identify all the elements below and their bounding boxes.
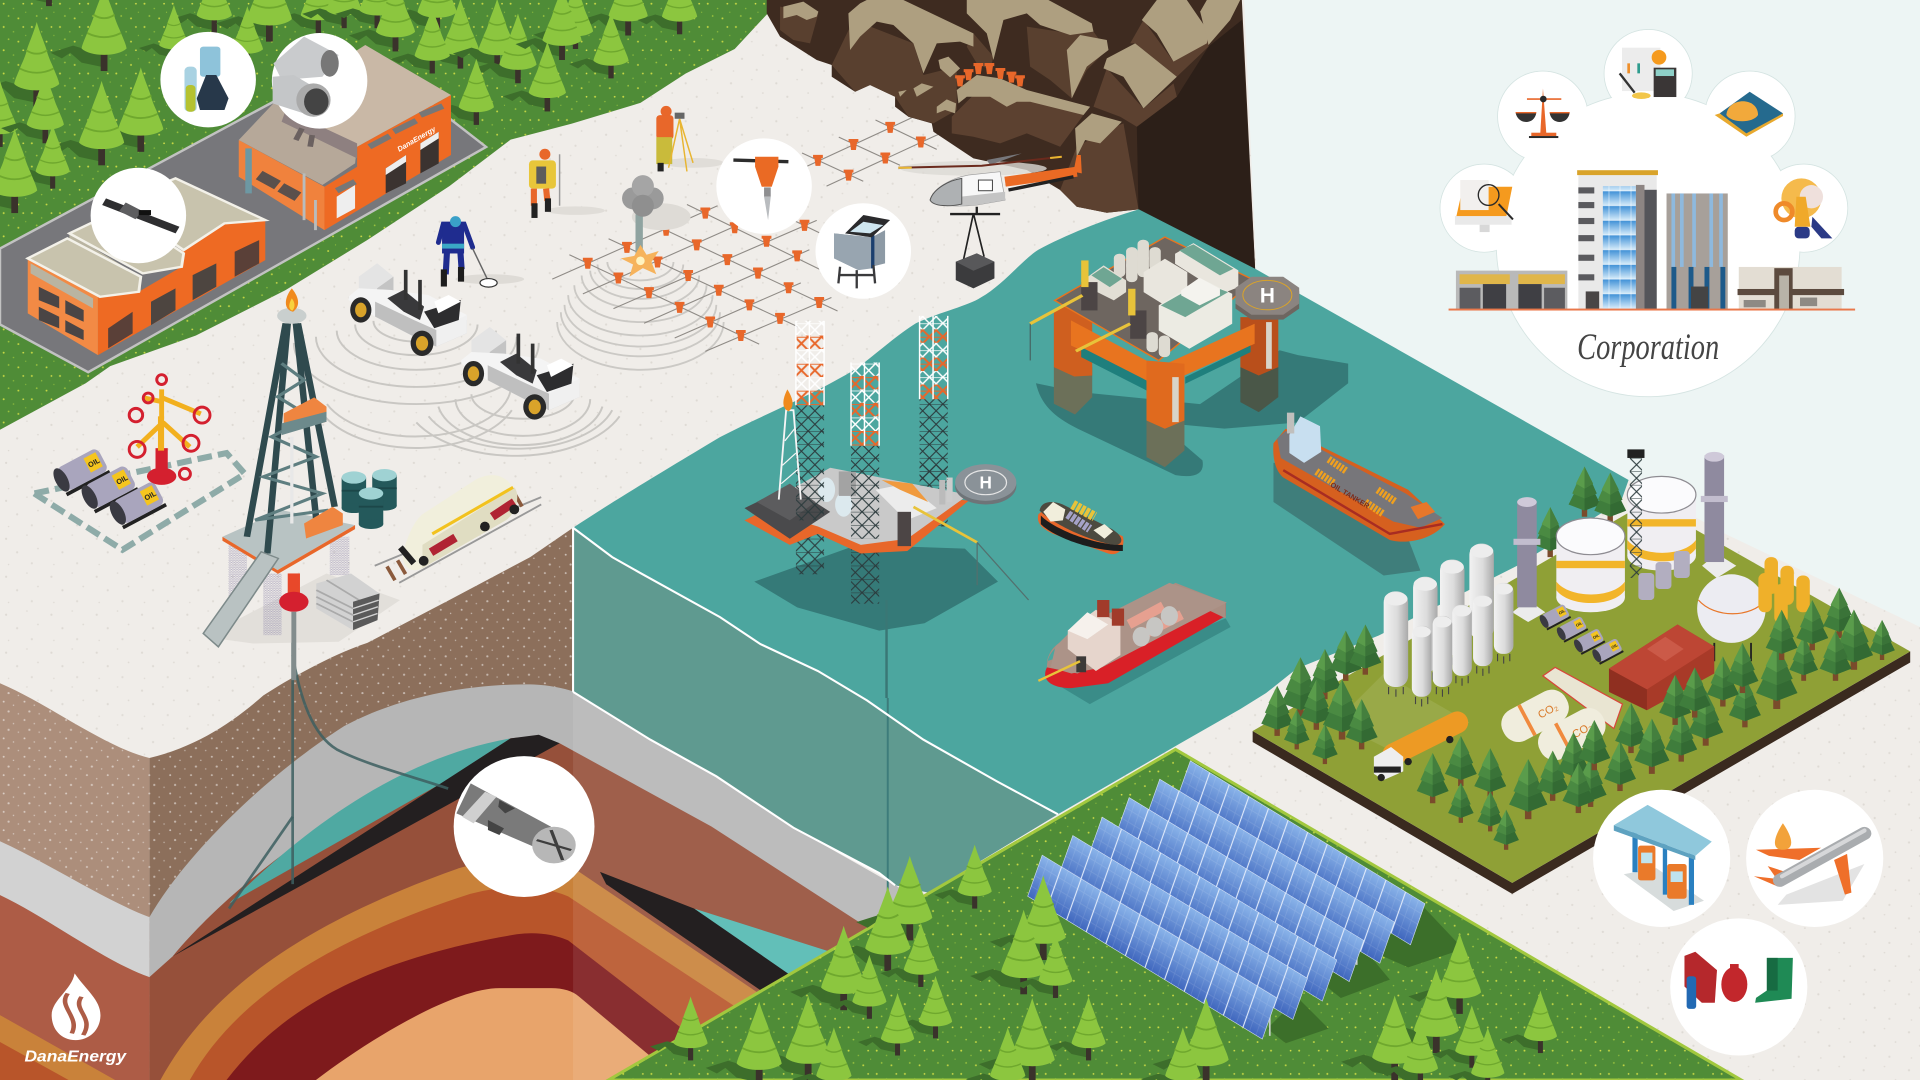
corporation script label: Corporation [1577,326,1719,367]
semi-submersible helipad [1236,277,1299,320]
icon: document review monitor [1455,180,1513,232]
deck modules [1087,243,1238,349]
orange stratum [190,887,759,1080]
oil tanker ship: OIL TANKER [1329,480,1372,511]
icon bubble: jackhammer [716,138,812,234]
well pipe [229,612,448,909]
scaffold legs [229,537,349,635]
flare derrick [779,389,801,500]
panel: geological cross-section [0,527,1063,1080]
submerged columns [1054,367,1278,467]
DanaEnergy logo: DanaEnergy [24,1049,127,1066]
semi-submersible platform [1030,237,1278,467]
icon: scales of justice [1516,88,1570,138]
grey rock band [149,684,1004,1080]
icon bubble: seismic box [816,203,911,299]
survey grid with markers [552,118,943,351]
deck [1055,237,1255,360]
cargo slings [963,213,984,260]
building: central glass tower [1577,170,1658,310]
rail tank car [375,475,541,583]
icon: helmet on blueprint [1715,92,1783,137]
stairway [203,552,278,647]
refinery red building [1609,624,1714,710]
icon bubble: fuel products and boots [1670,918,1807,1056]
orange cabins [282,397,343,538]
panel: forest and factory land [0,0,784,430]
panel: corporation bubble [1440,29,1855,397]
small supply boat [1038,502,1123,554]
seismic vehicle 1 [349,263,467,356]
stacked drill pipes [316,573,380,630]
seismic vehicle 2 [461,327,580,420]
icon bubble: fuel station [1593,790,1730,927]
dark red stratum [227,933,698,1080]
christmas tree valve [129,375,210,485]
platform [222,510,355,574]
refinery storage tanks [1556,476,1696,612]
derrick [247,323,335,553]
building: low right villa [1738,267,1844,310]
oil tanks [50,447,167,531]
gold stratum [160,859,784,1080]
jackup rig deck [744,468,1029,600]
crown and flame [277,288,306,324]
blowout preventer [279,573,309,680]
oil tanker ship [1273,413,1445,576]
worker with detector [438,216,524,287]
seismic rings: blast [557,262,724,370]
refinery tower and columns [1512,449,1736,622]
panel: sea with cross section [573,209,1629,894]
cargo box [956,253,994,288]
solar array shadow [1267,904,1463,1043]
panel: front land with forest [609,749,1741,1080]
seismic rings: trucks [294,321,620,456]
factory logo text: DanaEnergy [396,124,438,154]
icon: financial report and calculator [1620,48,1676,99]
semi-submersible helipad: H [1260,284,1275,307]
deck cylinders [1114,240,1170,357]
DanaEnergy logo [24,973,127,1066]
CO2 tanks: CO₂ [1536,701,1560,721]
refinery plot [1253,502,1910,894]
refinery back trees [1534,467,1626,557]
refinery spherical tank [1697,574,1766,661]
icon bubble: drill bit [454,756,594,897]
refinery yellow vessels [1758,557,1810,623]
cliff rocks [767,0,1255,270]
front forest trees [650,845,1557,1080]
road [0,53,486,372]
fence [34,453,245,550]
deck cranes [1030,260,1146,360]
refinery process vessels [1638,551,1690,600]
CO2 tanks: CO₂ [1570,721,1594,741]
solar panels [1027,760,1425,1040]
blast and smoke cloud [621,175,691,277]
icon: idea bulb with gears [1776,178,1832,238]
orange columns and beams [1054,300,1278,429]
helicopter with cargo [898,153,1082,288]
refinery pine trees [1261,588,1895,850]
black and teal strata [173,735,829,992]
CO2 tanks [1496,667,1622,766]
jackup helipad: H [980,473,992,493]
jackup rig shadow [754,545,998,631]
jackup legs above deck [796,316,948,539]
jackup legs below deck [796,465,948,698]
refinery white silos [1384,544,1513,707]
icon bubble: aircraft [1746,790,1883,927]
land wellhead compound [34,375,245,550]
worker with tripod [656,106,724,171]
worker with GPS pole [529,149,605,218]
left face strata [0,841,149,1080]
building: striped tower [1667,193,1728,310]
factory: lower orange building [28,178,265,355]
icon bubble: lab flasks [160,32,256,127]
icon bubble: downhole tool [91,168,186,263]
forest trees [0,0,697,213]
refinery fuel truck [1374,722,1457,781]
semi-submersible shadow [1036,350,1348,476]
water cross section [573,528,1058,893]
oil barrels [342,469,397,529]
factory: upper orange building [239,45,451,230]
land drilling rig [203,288,400,680]
red-brown stratum [149,737,980,1080]
jackup helipad [955,464,1016,504]
building: low left office [1456,271,1567,310]
red cargo ship [1038,583,1231,704]
peach core [316,988,673,1080]
ground line [1449,309,1855,311]
cliff survey markers [955,63,1025,86]
refinery small oil tanks [1538,603,1624,666]
icon bubble: threaded pipes [272,33,367,129]
